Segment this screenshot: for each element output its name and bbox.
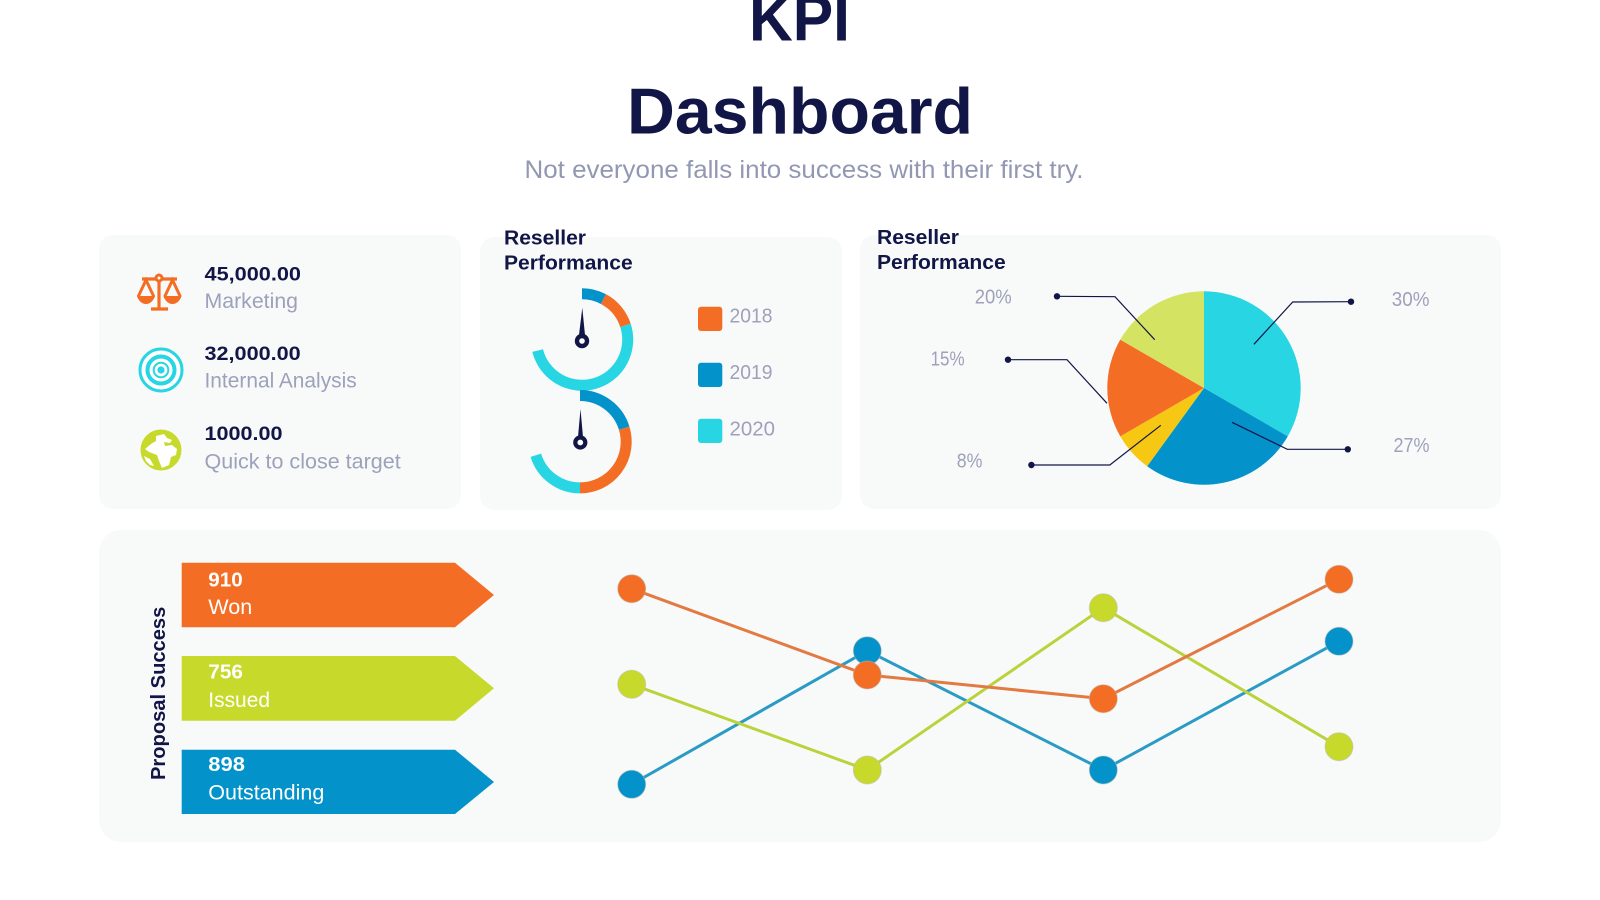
arrow: outstanding [182,750,494,814]
percentage labels: 8% [957,449,982,472]
heading: Performance [504,251,633,274]
heading [877,226,1006,274]
stat: internal analysis: Internal Analysis [204,370,357,393]
percentage labels [931,286,1430,472]
stat: quick to close target: Quick to close target [204,450,401,473]
arrow: outstanding: 898 [208,754,245,776]
heading [504,226,633,274]
arrow: issued: Issued [208,689,270,712]
percentage labels: 20% [975,286,1012,309]
heading: Reseller [877,226,959,249]
icon: globe [140,430,182,470]
line chart [618,565,1353,798]
arrow: won [182,563,494,627]
arrow: won: Won [208,596,252,619]
heading: Reseller [504,226,586,249]
panel: key figures [99,235,461,509]
panel: gauges [480,226,842,510]
percentage labels: 30% [1392,288,1429,311]
heading: Performance [877,251,1006,274]
gauge 2 [536,396,626,488]
title: Dashboard [627,74,973,148]
legend: 2020 [730,419,775,441]
arrow: issued: 756 [208,662,243,684]
arrow: won: 910 [208,570,243,592]
gauge 1 [538,294,628,385]
stat: marketing: Marketing [204,290,298,313]
panel: pie chart [860,226,1501,509]
panel: proposal success [99,530,1501,842]
legend: 2018 [730,305,772,327]
stat: quick to close target: 1000.00 [204,424,282,445]
legend: 2019 [730,362,772,384]
percentage labels: 27% [1394,434,1430,457]
arrow: outstanding: Outstanding [208,782,324,804]
arrow: issued [182,656,494,721]
subtitle: Not everyone falls into success with their first try. [524,156,1084,184]
percentage labels: 15% [931,348,965,371]
stat: quick to close target [204,424,401,473]
vertical heading: Proposal Success [148,607,170,780]
stat: internal analysis: 32,000.00 [204,344,301,365]
pie [1107,291,1301,485]
icon: scales [138,275,180,309]
leader lines [1005,293,1354,468]
stat: internal analysis [204,344,357,393]
stat: marketing [204,265,301,313]
stat: marketing: 45,000.00 [204,265,301,286]
title [627,0,973,148]
legend [698,305,775,443]
icon: target [139,348,183,392]
